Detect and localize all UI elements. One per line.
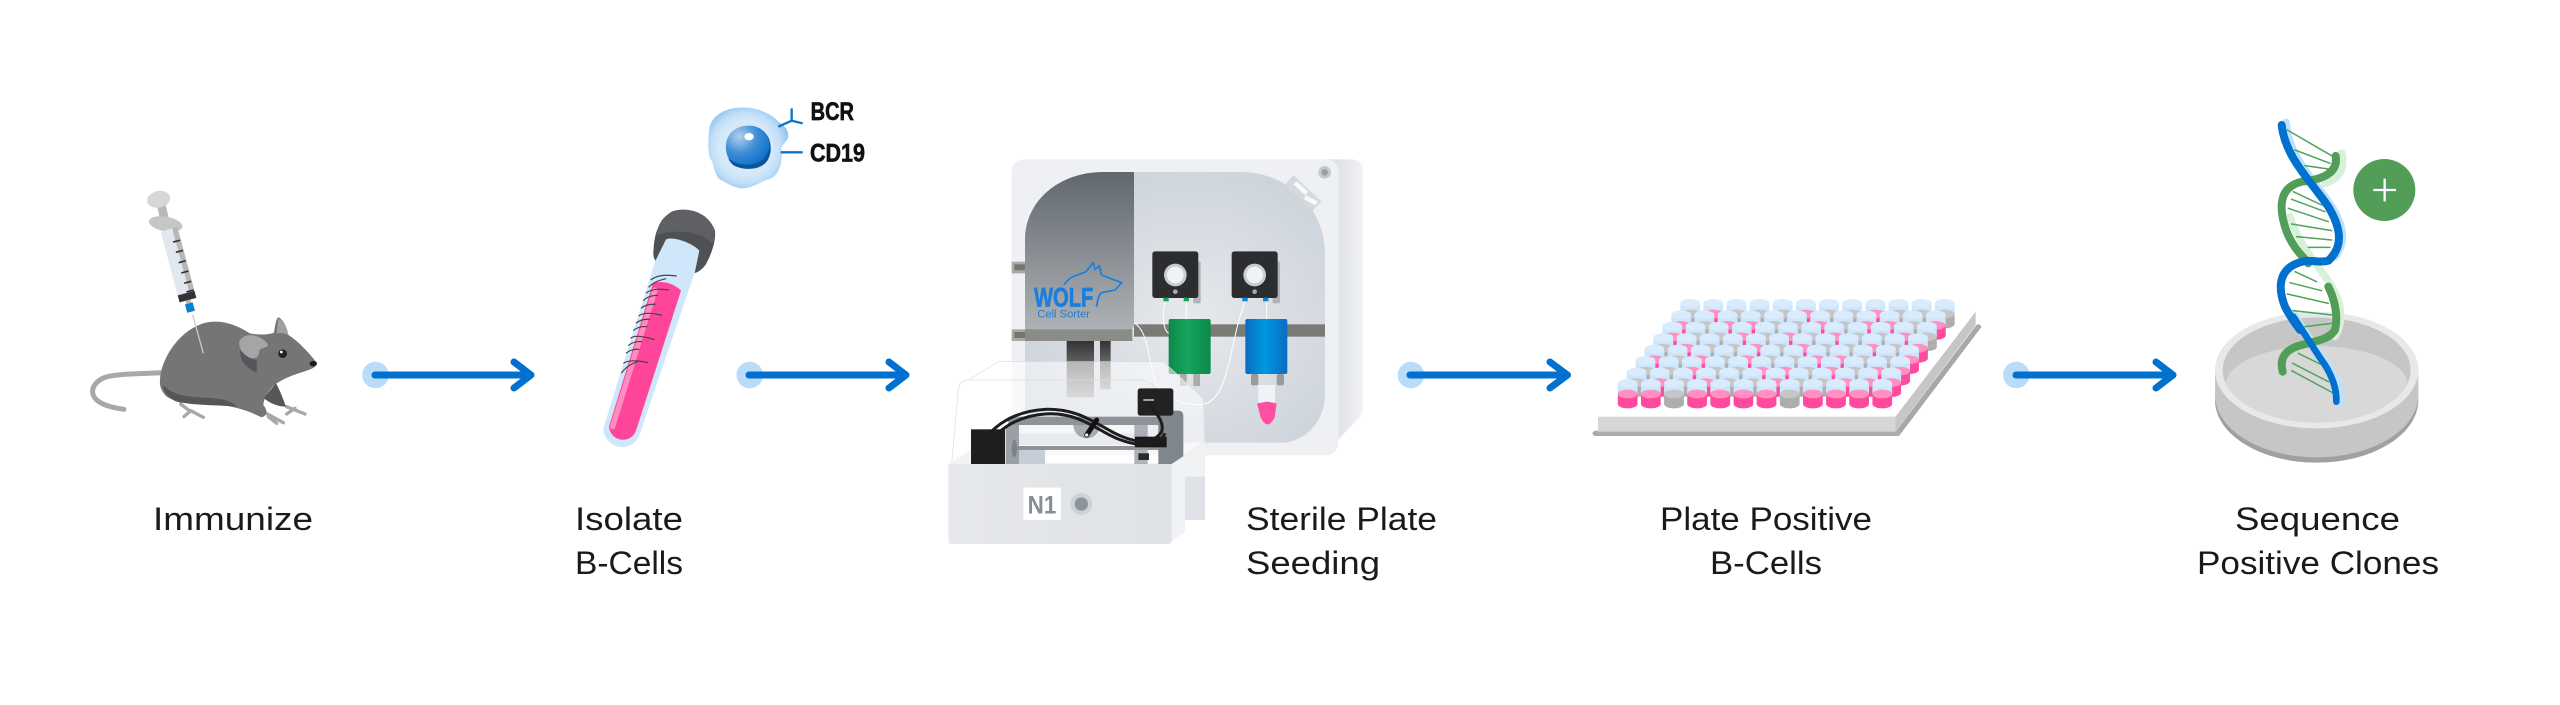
label: Sterile Plate Seeding: Sterile Plate	[1246, 501, 1437, 537]
icon: B-cell	[708, 98, 865, 188]
step 1 illustration: mouse with syringe	[93, 189, 317, 423]
label: Isolate B-Cells: B-Cells	[575, 545, 683, 581]
label: BCR: BCR	[811, 98, 854, 126]
step 3 illustration: cell sorter and N1	[948, 159, 1363, 544]
button	[1070, 493, 1092, 515]
arrow 3	[1398, 362, 1568, 388]
label: Immunize: Immunize	[153, 501, 313, 537]
logo: WOLF Cell Sorter: WOLF	[1034, 283, 1093, 313]
label: Isolate B-Cells: Isolate	[575, 501, 683, 537]
DNA helix	[2281, 123, 2343, 402]
label: Sterile Plate Seeding	[1246, 501, 1437, 581]
label: Plate Positive B-Cells: B-Cells	[1710, 545, 1822, 581]
icon: syringe	[146, 189, 203, 353]
well row C	[1636, 356, 1910, 385]
icon: test tube	[603, 210, 715, 447]
step 5 illustration: DNA in petri dish	[2215, 123, 2418, 463]
label: Isolate B-Cells	[575, 501, 683, 581]
well row H (back)	[1680, 299, 1955, 328]
plate base	[1596, 312, 1978, 433]
well row F	[1662, 322, 1937, 351]
step 2 illustration: tube and B-cell	[603, 98, 865, 447]
pump: blue line	[1232, 251, 1287, 424]
label: N1: N1	[1028, 492, 1057, 519]
logo: WOLF Cell Sorter	[1034, 263, 1122, 321]
machine: WOLF Cell Sorter	[1012, 159, 1363, 455]
label: Sequence Positive Clones: Positive Clones	[2197, 545, 2439, 581]
label: Sterile Plate Seeding: Seeding	[1246, 545, 1380, 581]
mechanism	[971, 429, 1005, 464]
pump: green line	[1152, 251, 1211, 386]
well row B	[1627, 368, 1901, 397]
wells	[1618, 299, 1955, 408]
label: Plate Positive B-Cells: Plate Positive	[1660, 501, 1872, 537]
icon: mouse	[93, 317, 317, 423]
petri dish	[2215, 312, 2418, 463]
box body	[948, 450, 971, 464]
arrow 1	[362, 362, 531, 388]
arrow 4	[2003, 362, 2173, 388]
step 4 illustration: 96-well plate	[1596, 299, 1978, 433]
well row A (front)	[1618, 379, 1892, 408]
label: Sequence Positive Clones	[2197, 501, 2439, 581]
rungs	[2287, 130, 2335, 394]
well row E	[1653, 333, 1928, 363]
logo: WOLF Cell Sorter: Cell Sorter	[1037, 309, 1090, 321]
label: CD19: CD19	[810, 140, 865, 168]
well row D	[1645, 345, 1919, 374]
label: Plate Positive B-Cells	[1660, 501, 1872, 581]
device: N1	[948, 362, 1205, 544]
arrow 2	[736, 362, 906, 388]
label: Sequence Positive Clones: Sequence	[2235, 501, 2400, 537]
tubing	[1134, 301, 1267, 405]
cables	[973, 402, 1165, 464]
well row G	[1671, 310, 1946, 340]
dome cover	[952, 362, 1205, 464]
icon: plus badge	[2353, 159, 2415, 221]
